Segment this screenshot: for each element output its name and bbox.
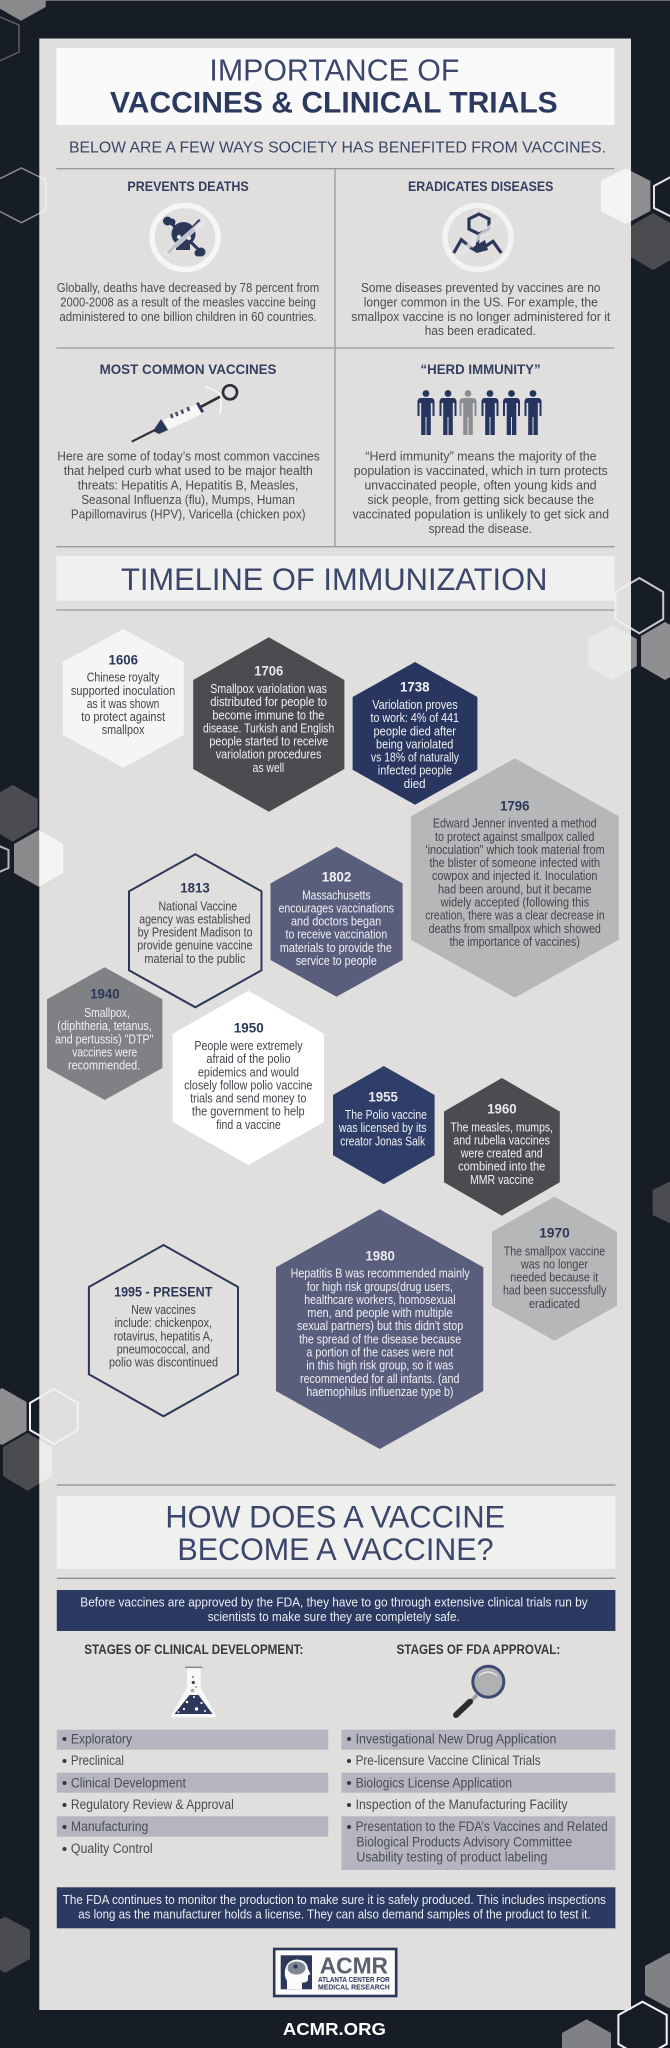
timeline hexagon: 1738: Variolation proves xyxy=(372,698,458,712)
panel: most common vaccines xyxy=(57,361,320,521)
text: eradicates diseases body: has been eradicated. xyxy=(425,323,536,338)
text: prevents deaths body xyxy=(57,280,319,324)
timeline hexagon: 1980: Hepatitis B was recommended mainly xyxy=(291,1267,470,1281)
timeline hexagon: 1796: ‘inoculation” which took material from xyxy=(425,843,605,857)
timeline hexagon: 1950: find a vaccine xyxy=(216,1118,281,1132)
timeline hexagon: 1970 xyxy=(492,1197,617,1341)
list: fda stages: Biological Products Advisory Committee xyxy=(356,1834,572,1849)
timeline hexagon: 1950: epidemics and would xyxy=(198,1065,299,1079)
timeline hexagon: 1960 xyxy=(444,1078,560,1216)
list: fda stages xyxy=(342,1730,615,1870)
timeline hexagon: 1980: sexual partners) but this didn't stop xyxy=(297,1319,463,1333)
text: eradicates diseases body: Some diseases prevented by vaccines are no xyxy=(361,280,600,295)
timeline hexagon: 1706: 1706 xyxy=(254,663,284,678)
timeline hexagon: 1796: had been around, but it became xyxy=(438,882,592,896)
heading: timeline of immunization: TIMELINE OF IMMUNIZATION xyxy=(121,561,547,597)
subtitle: BELOW ARE A FEW WAYS SOCIETY HAS BENEFITED FROM VACCINES. xyxy=(69,140,606,157)
timeline hexagon: 1796: widely accepted (following this xyxy=(440,896,589,910)
timeline hexagon: 1706: Smallpox variolation was xyxy=(210,682,327,696)
logo: ACMR: ACMR xyxy=(320,1953,388,1979)
heading: eradicates diseases: ERADICATES DISEASES xyxy=(408,178,553,194)
timeline hexagon: 1960: MMR vaccine xyxy=(470,1173,534,1187)
timeline hexagon: 1980: 1980 xyxy=(365,1248,395,1263)
timeline hexagon: 1955: The Polio vaccine xyxy=(345,1108,427,1122)
timeline hexagon: 1940: recommended. xyxy=(68,1058,140,1072)
list: fda stages: Investigational New Drug Application xyxy=(356,1731,556,1746)
timeline hexagon: 1706 xyxy=(193,637,344,812)
list: clinical stages: Preclinical xyxy=(71,1753,124,1768)
timeline hexagon: 1738: infected people xyxy=(378,764,452,778)
list: clinical stages: Manufacturing xyxy=(71,1819,148,1834)
heading: fda approval: STAGES OF FDA APPROVAL: xyxy=(397,1642,560,1657)
timeline hexagon: 1995 to present xyxy=(89,1245,238,1416)
timeline hexagon: 1802: 1802 xyxy=(322,870,351,885)
timeline hexagon: 1940: and pertussis) "DTP" xyxy=(55,1032,153,1046)
timeline hexagon: 1960: The measles, mumps, xyxy=(450,1120,553,1134)
timeline hexagon: 1706: distributed for people to xyxy=(210,695,327,709)
title line: importance of: IMPORTANCE OF xyxy=(209,53,459,88)
timeline hexagon: 1960: combined into the xyxy=(458,1160,545,1174)
list: clinical stages: Clinical Development xyxy=(71,1775,186,1790)
footer url: ACMR.ORG xyxy=(283,2019,386,2039)
timeline hexagon: 1606: supported inoculation xyxy=(71,684,175,698)
text: prevents deaths body: 2000-2008 as a result of the measles vaccine being xyxy=(60,294,316,309)
timeline hexagon: 1606: to protect against xyxy=(81,710,165,724)
list: fda stages: Usability testing of product labeling xyxy=(356,1850,547,1865)
icon: virus crossed out xyxy=(445,206,511,270)
timeline hexagon: 1970: The smallpox vaccine xyxy=(504,1244,605,1258)
timeline hexagon: 1796: Edward Jenner invented a method xyxy=(433,817,597,831)
heading: how does a vaccine become a vaccine xyxy=(57,1496,615,1569)
heading: how does a vaccine become a vaccine: BECOME A VACCINE? xyxy=(177,1531,494,1567)
timeline hexagon: 1796: to protect against smallpox called xyxy=(435,830,594,844)
list: fda stages: Biologics License Application xyxy=(356,1775,512,1790)
timeline hexagon: 1940: vaccines were xyxy=(72,1045,137,1059)
heading: most common vaccines: MOST COMMON VACCINES xyxy=(100,361,276,377)
timeline hexagon: 1606: 1606 xyxy=(108,652,138,667)
icon: skull crossed out xyxy=(152,206,218,270)
text: eradicates diseases body: smallpox vaccine is no longer administered for it xyxy=(351,309,611,324)
timeline hexagon: 1980 xyxy=(276,1209,483,1449)
list: clinical stages xyxy=(57,1730,328,1856)
panel: stages of clinical development xyxy=(57,1642,328,1856)
heading: clinical development: STAGES OF CLINICAL DEVELOPMENT: xyxy=(84,1642,303,1657)
timeline hexagon: 1970: 1970 xyxy=(539,1226,570,1241)
timeline hexagon: 1738: vs 18% of naturally xyxy=(371,750,460,764)
timeline hexagon: 1960: 1960 xyxy=(487,1101,517,1116)
callout: fda monitoring: The FDA continues to monitor the production to make sure it is safely produced. This includes inspections xyxy=(63,1892,606,1907)
heading: herd immunity: “HERD IMMUNITY” xyxy=(420,361,541,377)
timeline hexagon: 1995 to present: polio was discontinued xyxy=(109,1356,218,1370)
timeline hexagon: 1995 to present: pneumococcal, and xyxy=(117,1342,210,1356)
text: herd immunity body: “Herd immunity” means the majority of the xyxy=(365,449,597,464)
timeline hexagon: 1813: National Vaccine xyxy=(158,899,237,913)
callout: fda monitoring: as long as the manufacturer holds a license. They can also demand samples of the product to test it. xyxy=(78,1907,591,1922)
timeline hexagon: 1970: had been successfully xyxy=(503,1284,607,1298)
timeline hexagon: 1940: Smallpox, xyxy=(84,1006,130,1020)
icon: magnifying glass xyxy=(456,1666,504,1715)
timeline hexagon: 1940: (diphtheria, tetanus, xyxy=(57,1019,152,1033)
list: fda stages: Pre-licensure Vaccine Clinical Trials xyxy=(356,1753,541,1768)
text: herd immunity body: spread the disease. xyxy=(429,521,532,536)
timeline hexagon: 1813: material to the public xyxy=(144,952,245,966)
timeline hexagon: 1813: by President Madison to xyxy=(138,926,253,940)
icon: flask xyxy=(172,1667,216,1716)
text: most common vaccines body: threats: Hepatitis A, Hepatitis B, Measles, xyxy=(78,478,298,492)
timeline hexagon: 1738: 1738 xyxy=(400,680,430,695)
text: eradicates diseases body xyxy=(351,280,611,338)
text: eradicates diseases body: longer common in the US. For example, the xyxy=(364,294,598,309)
timeline hexagon: 1738: people died after xyxy=(374,724,456,738)
text: herd immunity body xyxy=(353,449,609,536)
text: prevents deaths body: Globally, deaths have decreased by 78 percent from xyxy=(57,280,319,295)
timeline hexagon: 1802: service to people xyxy=(296,954,377,968)
timeline hexagon: 1738: being variolated xyxy=(376,737,453,751)
logo: ACMR xyxy=(274,1949,396,1996)
text: most common vaccines body: Papillomavirus (HPV), Varicella (chicken pox) xyxy=(71,506,306,521)
panel: herd immunity xyxy=(353,361,609,536)
timeline hexagon: 1980: in this high risk group, so it was xyxy=(306,1359,453,1373)
timeline hexagon: 1706: become immune to the xyxy=(212,708,324,722)
list: fda stages: Inspection of the Manufacturing Facility xyxy=(356,1797,568,1812)
list: clinical stages: Quality Control xyxy=(71,1841,153,1856)
timeline hexagon: 1738: died xyxy=(404,777,426,791)
timeline hexagon: 1955: creator Jonas Salk xyxy=(340,1134,426,1148)
timeline hexagon: 1796: cowpox and injected it. Inoculation xyxy=(432,869,597,883)
panel: eradicates diseases xyxy=(351,178,611,338)
timeline hexagon: 1802: Massachusetts xyxy=(302,888,370,902)
timeline hexagon: 1706: as well xyxy=(253,761,284,775)
timeline hexagon: 1802: and doctors began xyxy=(291,915,381,929)
heading: how does a vaccine become a vaccine: HOW DOES A VACCINE xyxy=(165,1499,505,1535)
timeline hexagon: 1980: haemophilus influenzae type b) xyxy=(306,1385,453,1399)
timeline hexagon: 1796 xyxy=(411,758,619,998)
timeline hexagon: 1950: afraid of the polio xyxy=(206,1052,291,1066)
icon: row of people xyxy=(418,390,542,435)
timeline hexagon: 1706: disease. Turkish and English xyxy=(203,721,334,735)
timeline hexagon: 1950: 1950 xyxy=(234,1020,264,1035)
timeline hexagon: 1980: men, and people with multiple xyxy=(307,1306,453,1320)
timeline hexagon: 1995 to present: New vaccines xyxy=(131,1303,196,1317)
timeline hexagon: 1813: 1813 xyxy=(180,880,210,895)
text: herd immunity body: vaccinated population is unlikely to get sick and xyxy=(353,506,609,521)
timeline hexagon: 1606: as it was shown xyxy=(87,697,159,711)
timeline hexagon: 1995 to present: 1995 - PRESENT xyxy=(114,1284,213,1299)
timeline hexagon: 1706: people started to receive xyxy=(209,734,328,748)
heading: timeline of immunization xyxy=(56,556,614,601)
timeline hexagon: 1606: Chinese royalty xyxy=(87,671,160,685)
text: prevents deaths body: administered to one billion children in 60 countries. xyxy=(59,309,317,324)
icon: syringe xyxy=(132,385,237,442)
logo: ACMR: ATLANTA CENTER FOR xyxy=(318,1975,390,1984)
timeline hexagon: 1940 xyxy=(47,967,162,1100)
timeline hexagon: 1970: was no longer xyxy=(520,1257,588,1271)
timeline hexagon: 1802: materials to provide the xyxy=(280,941,392,955)
timeline hexagon: 1955: 1955 xyxy=(368,1089,398,1104)
timeline hexagon: 1960: and rubella vaccines xyxy=(453,1133,550,1147)
logo: ACMR: MEDICAL RESEARCH xyxy=(318,1983,390,1992)
timeline hexagon: 1980: for high risk groups(drug users, xyxy=(307,1280,453,1294)
timeline hexagon: 1960: were created and xyxy=(460,1147,543,1161)
panel: prevents deaths xyxy=(57,178,319,324)
timeline hexagon: 1995 to present: include: chickenpox, xyxy=(114,1316,212,1330)
heading: prevents deaths: PREVENTS DEATHS xyxy=(127,178,249,194)
timeline hexagon: 1796: deaths from smallpox which showed xyxy=(429,922,601,936)
timeline hexagon: 1995 to present: rotavirus, hepatitis A, xyxy=(114,1329,213,1343)
timeline hexagon: 1950: People were extremely xyxy=(194,1039,303,1053)
timeline hexagon: 1980: recommended for all infants. (and xyxy=(300,1372,459,1386)
timeline hexagon: 1796: 1796 xyxy=(500,798,530,813)
list: clinical stages: Regulatory Review & Approval xyxy=(71,1797,234,1812)
callout: fda approval intro: scientists to make sure they are completely safe. xyxy=(208,1609,460,1624)
list: fda stages: Presentation to the FDA’s Vaccines and Related xyxy=(356,1819,608,1834)
timeline hexagon: 1955: was licensed by its xyxy=(338,1121,426,1135)
timeline hexagon: 1950: the government to help xyxy=(192,1105,305,1119)
timeline hexagon: 1796: the importance of vaccines) xyxy=(450,935,580,949)
panel: stages of fda approval xyxy=(342,1642,615,1870)
timeline hexagon: 1970: eradicated xyxy=(529,1297,580,1311)
callout: fda approval intro: Before vaccines are approved by the FDA, they have to go through extensive clinical trials run by xyxy=(80,1595,588,1610)
title banner xyxy=(56,48,614,125)
timeline hexagon: 1980: the spread of the disease because xyxy=(299,1332,461,1346)
timeline hexagon: 1802: encourages vaccinations xyxy=(279,901,394,915)
timeline hexagon: 1950 xyxy=(173,991,324,1165)
text: herd immunity body: unvaccinated people, often young kids and xyxy=(364,478,597,492)
title line: vaccines and clinical trials: VACCINES & CLINICAL TRIALS xyxy=(110,87,558,120)
timeline hexagon: 1813: agency was established xyxy=(139,912,250,926)
timeline hexagon: 1813 xyxy=(129,854,262,1007)
list: clinical stages: Exploratory xyxy=(71,1731,132,1746)
timeline hexagon: 1940: 1940 xyxy=(90,987,120,1002)
text: herd immunity body: sick people, from getting sick because the xyxy=(368,492,594,507)
callout: fda monitoring xyxy=(57,1887,615,1928)
timeline hexagon: 1802: to receive vaccination xyxy=(286,928,387,942)
timeline hexagon: 1706: variolation procedures xyxy=(216,748,321,762)
timeline hexagon: 1980: a portion of the cases were not xyxy=(306,1346,454,1360)
timeline hexagon: 1738 xyxy=(353,662,477,805)
text: most common vaccines body xyxy=(57,449,320,521)
timeline hexagon: 1796: creation, there was a clear decrease in xyxy=(425,909,605,923)
timeline hexagon: 1802 xyxy=(270,847,403,997)
callout: fda approval intro xyxy=(57,1590,615,1631)
timeline hexagon: 1606: smallpox xyxy=(102,723,145,737)
text: most common vaccines body: that helped curb what used to be major health xyxy=(64,463,313,478)
timeline hexagon: 1738: to work: 4% of 441 xyxy=(370,711,459,725)
timeline hexagon: 1950: trials and send money to xyxy=(190,1092,306,1106)
timeline hexagon: 1980: healthcare workers, homosexual xyxy=(304,1293,456,1307)
timeline hexagon: 1813: provide genuine vaccine xyxy=(137,939,253,953)
timeline hexagon: 1796: the blister of someone infected with xyxy=(430,856,600,870)
text: most common vaccines body: Here are some of today’s most common vaccines xyxy=(57,449,320,464)
text: most common vaccines body: Seasonal Influenza (flu), Mumps, Human xyxy=(81,492,295,507)
timeline hexagon: 1970: needed because it xyxy=(510,1271,599,1285)
timeline hexagon: 1950: closely follow polio vaccine xyxy=(184,1078,312,1092)
timeline hexagon: 1955 xyxy=(333,1066,435,1184)
timeline hexagon: 1606 xyxy=(63,629,184,768)
text: herd immunity body: population is vaccinated, which in turn protects xyxy=(354,463,608,478)
